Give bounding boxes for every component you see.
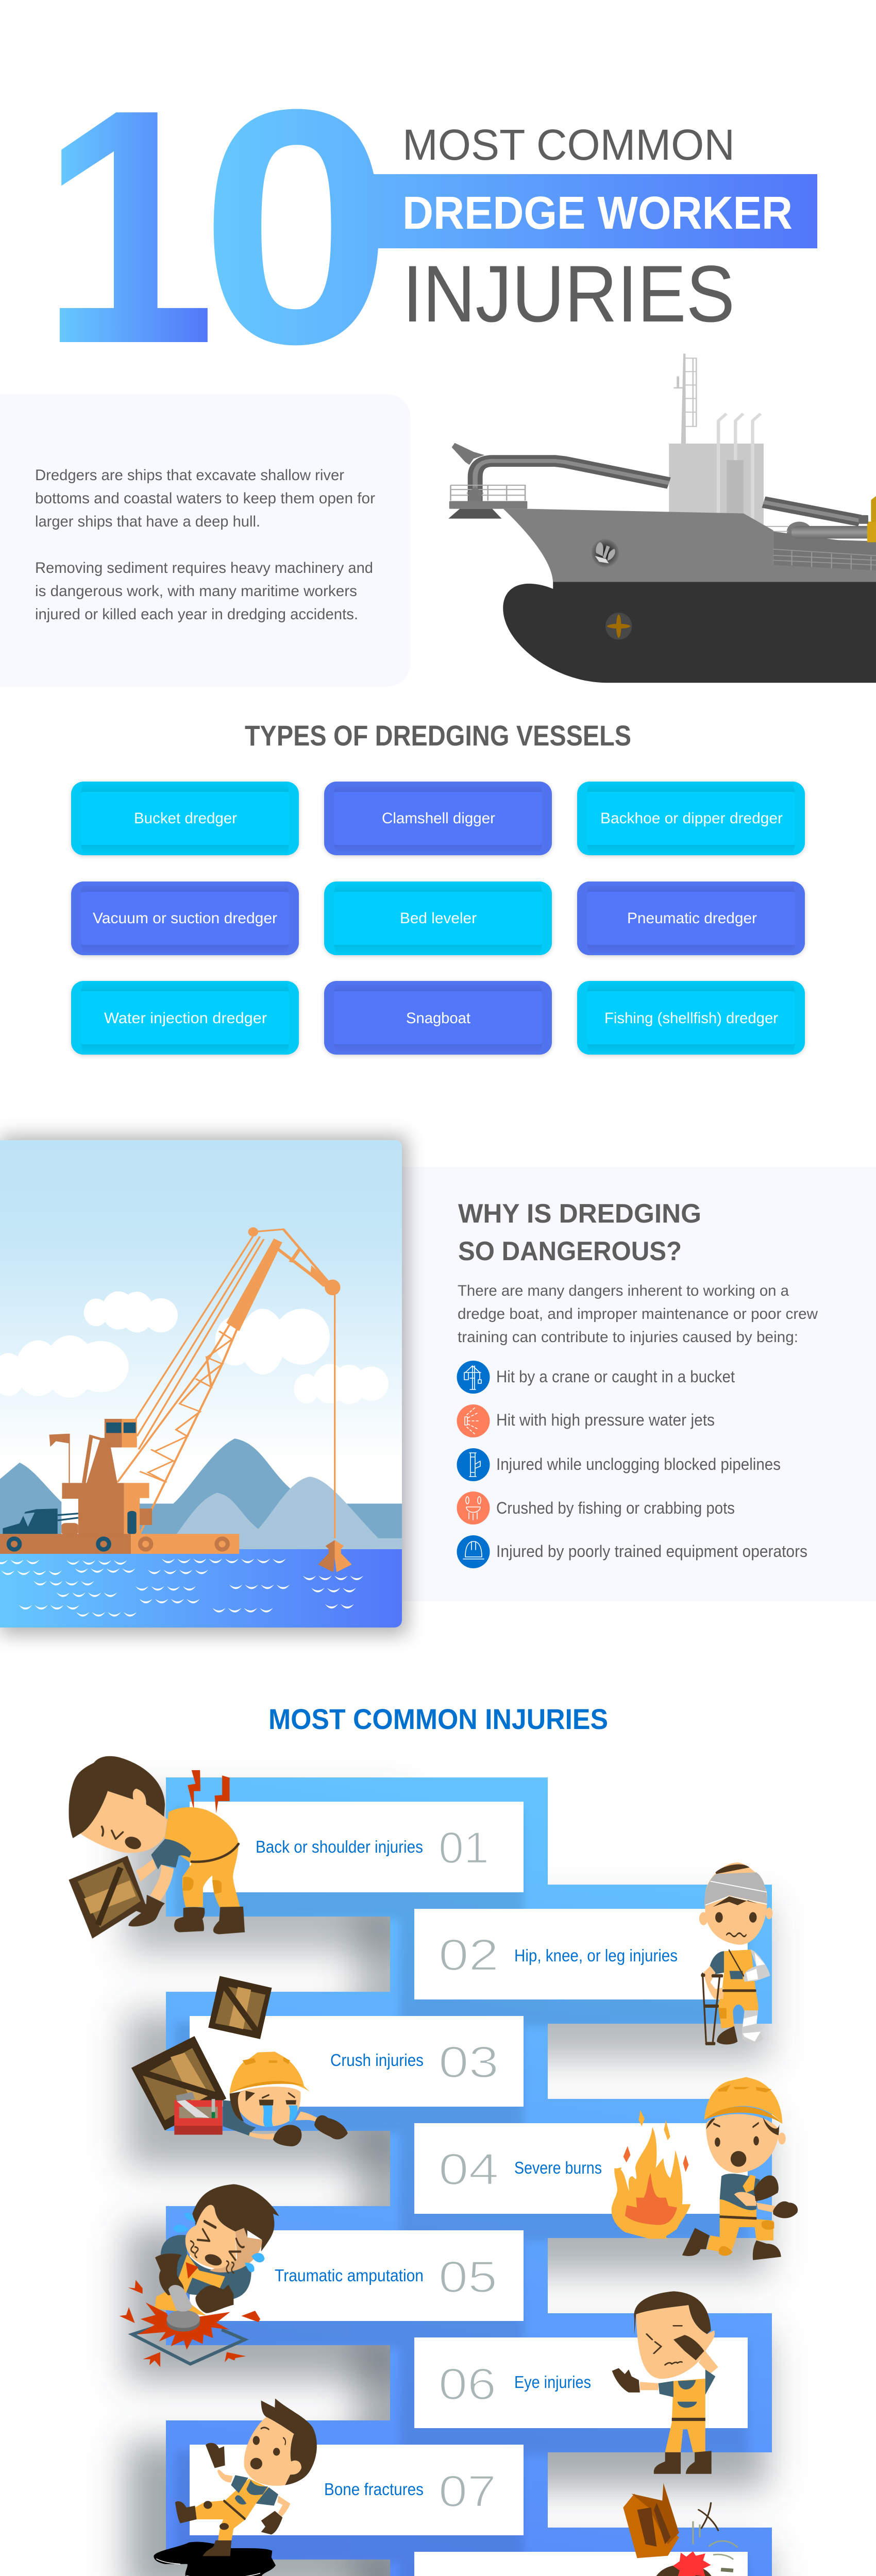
card 06: eye injuries	[414, 2337, 748, 2428]
card: clamshell digger: Clamshell digger	[382, 810, 495, 827]
title: 10 most common dredge worker injuries	[40, 40, 817, 413]
text block: dangers intro: There are many dangers inherent to working on a	[458, 1282, 789, 1299]
mountains	[0, 1438, 402, 1550]
panel: intro text: Removing sediment requires heavy machinery and	[35, 560, 373, 577]
panel: intro text: bottoms and coastal waters to keep them open for	[35, 490, 375, 507]
icon: propeller emblem	[605, 613, 632, 639]
panel: intro text: larger ships that have a deep hull.	[35, 513, 260, 530]
bullet: crab pots	[457, 1492, 735, 1524]
panel: why is dredging so dangerous	[402, 1167, 876, 1601]
card: water injection dredger	[71, 981, 299, 1055]
heading: why is dredging so dangerous: SO DANGEROUS?	[458, 1236, 682, 1266]
barge	[0, 1534, 239, 1554]
illustration: worker 2 bandaged on crutch	[699, 1862, 772, 2044]
title line two: DREDGE WORKER	[402, 188, 793, 239]
card 01: back or shoulder injuries: 01	[439, 1823, 489, 1873]
crane cab and tower	[3, 1419, 152, 1535]
heading: why is dredging so dangerous: WHY IS DREDGING	[458, 1199, 701, 1229]
bullet: pipelines	[457, 1448, 781, 1481]
card 01: back or shoulder injuries: Back or shoulder injuries	[256, 1837, 423, 1856]
illustration: worker 4 beside flames	[612, 2077, 798, 2260]
bullet: equipment operators	[457, 1535, 807, 1568]
bullet: crab pots: Crushed by fishing or crabbing pots	[496, 1499, 735, 1517]
heading: types of dredging vessels: TYPES OF DREDGING VESSELS	[245, 719, 631, 752]
title line one: MOST COMMON	[402, 121, 735, 169]
card: vacuum or suction dredger	[71, 882, 299, 956]
card: clamshell digger	[324, 782, 552, 856]
card: pneumatic dredger	[577, 882, 805, 956]
card 02: hip, knee, or leg injuries	[414, 1909, 748, 1999]
card 04: severe burns: Severe burns	[514, 2158, 602, 2177]
falling box	[623, 2483, 679, 2558]
illustration: worker 7 slipping on oil	[154, 2398, 317, 2576]
card 05: traumatic amputation	[190, 2230, 524, 2321]
bullet: crane: Hit by a crane or caught in a bucket	[496, 1367, 735, 1386]
card: fishing (shellfish) dredger	[577, 981, 805, 1055]
card 08: head injuries	[414, 2552, 748, 2576]
card: vacuum or suction dredger: Vacuum or suction dredger	[93, 910, 277, 927]
text block: dangers intro: dredge boat, and improper maintenance or poor crew	[458, 1306, 818, 1323]
fire	[612, 2110, 690, 2239]
crane boom	[117, 1229, 335, 1541]
crane bucket	[318, 1540, 352, 1572]
card: bucket dredger	[71, 782, 299, 856]
illustration: worker 5 traumatic amputation	[120, 2184, 279, 2367]
card 06: eye injuries: Eye injuries	[514, 2372, 591, 2392]
card 07: bone fractures	[190, 2445, 524, 2535]
card 02: hip, knee, or leg injuries: 02	[439, 1930, 499, 1980]
card 05: traumatic amputation: Traumatic amputation	[275, 2266, 424, 2285]
heading: most common injuries: MOST COMMON INJURIES	[268, 1703, 608, 1735]
big numeral one: 1	[40, 40, 216, 413]
card 04: severe burns	[414, 2123, 748, 2214]
card: pneumatic dredger: Pneumatic dredger	[627, 910, 757, 927]
card 07: bone fractures: 07	[439, 2467, 496, 2516]
bullet: water jets	[457, 1404, 715, 1437]
card 03: crush injuries	[190, 2016, 524, 2107]
bullet: water jets: Hit with high pressure water jets	[496, 1411, 715, 1429]
text block: dangers intro	[458, 1282, 818, 1346]
sea	[0, 1534, 402, 1628]
panel: intro text: injured or killed each year in dredging accidents.	[35, 606, 358, 623]
illustration: worker 1 with back pain lifting crate	[69, 1756, 245, 1939]
illustration: worker 3 crushed by crate	[131, 2036, 348, 2146]
card: water injection dredger: Water injection dredger	[104, 1010, 267, 1027]
bullet: equipment operators: Injured by poorly trained equipment operators	[496, 1542, 807, 1561]
card: bed leveler	[324, 882, 552, 956]
chart: serpentine injury ribbon	[126, 1772, 783, 2576]
card 03: crush injuries: 03	[439, 2038, 499, 2087]
card 05: traumatic amputation: 05	[439, 2252, 497, 2302]
illustration: worker 6 eye injury	[612, 2291, 718, 2474]
panel: intro text: is dangerous work, with many maritime workers	[35, 583, 357, 600]
card: snagboat: Snagboat	[406, 1010, 471, 1027]
card: backhoe or dipper dredger: Backhoe or dipper dredger	[600, 810, 783, 827]
heading: why is dredging so dangerous	[458, 1199, 701, 1266]
illustration: worker 8 head injury	[623, 2483, 740, 2576]
card: fishing (shellfish) dredger: Fishing (shellfish) dredger	[604, 1010, 778, 1027]
waves	[0, 1558, 363, 1617]
illustration: crane barge at sea	[0, 1136, 407, 1635]
card 03: crush injuries: Crush injuries	[330, 2050, 424, 2070]
card: bed leveler: Bed leveler	[400, 910, 477, 927]
card 02: hip, knee, or leg injuries: Hip, knee, or leg injuries	[514, 1946, 678, 1965]
icon: ship anchor emblem	[592, 539, 619, 567]
panel: intro text	[0, 394, 411, 687]
bullet: crane	[457, 1361, 735, 1394]
card 06: eye injuries: 06	[439, 2360, 496, 2409]
clouds	[0, 1292, 389, 1404]
bullet: pipelines: Injured while unclogging blocked pipelines	[496, 1455, 781, 1473]
panel: vessel type cards	[71, 782, 805, 1055]
card: backhoe or dipper dredger	[577, 782, 805, 856]
illustration: dredger ship	[448, 353, 876, 683]
illustration: falling crate	[208, 1976, 272, 2039]
panel: intro text: Dredgers are ships that excavate shallow river	[35, 467, 344, 484]
title line three: INJURIES	[402, 249, 735, 339]
card 01: back or shoulder injuries	[190, 1802, 524, 1892]
card 04: severe burns: 04	[439, 2145, 499, 2194]
card: bucket dredger: Bucket dredger	[134, 810, 237, 827]
text block: dangers intro: training can contribute to injuries caused by being:	[458, 1329, 798, 1346]
icon: toolbox	[174, 2092, 223, 2134]
title banner	[361, 174, 817, 248]
card: snagboat	[324, 981, 552, 1055]
card 07: bone fractures: Bone fractures	[324, 2480, 424, 2499]
big numeral zero: 0	[200, 40, 393, 413]
